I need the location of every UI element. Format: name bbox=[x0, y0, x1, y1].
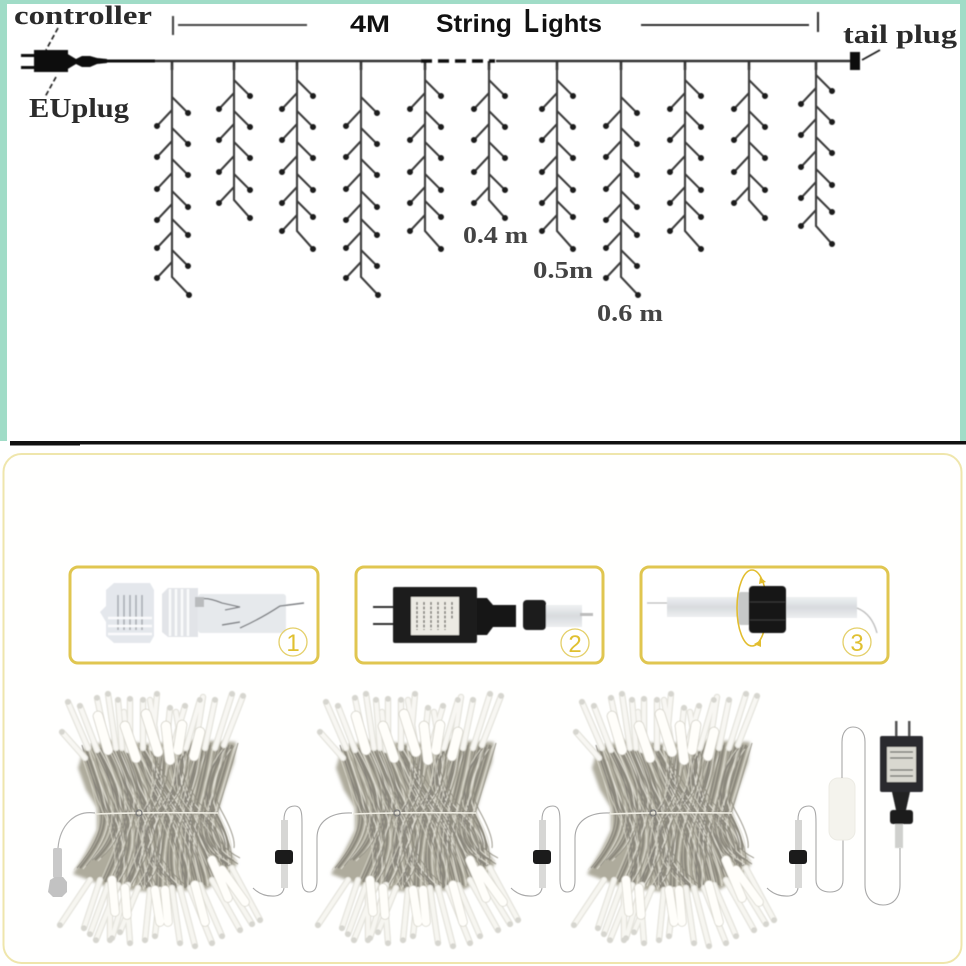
connector 1 and lead to bundle 2 bbox=[253, 806, 352, 896]
title: String Lights: String bbox=[436, 10, 512, 38]
dashed section of the cable bbox=[421, 59, 495, 63]
number 3: 3 bbox=[850, 630, 864, 657]
strand 0.6 m bbox=[606, 66, 638, 295]
number 3 bbox=[843, 628, 871, 657]
icon: black nut bbox=[749, 586, 786, 633]
icon: EU plug and controller bbox=[21, 50, 155, 72]
light bundle 1 bbox=[60, 694, 260, 946]
strand 0.5 m bbox=[801, 61, 832, 244]
icon: joined connector bbox=[647, 592, 877, 633]
title: String Lights: L bbox=[524, 2, 539, 39]
icon: end cap bbox=[100, 583, 154, 643]
string lights wiring diagram bbox=[21, 12, 880, 295]
icon: connector nut and lead bbox=[523, 600, 593, 630]
leader: EU plug bbox=[45, 77, 56, 97]
number 2 bbox=[561, 629, 589, 658]
leader: controller bbox=[46, 28, 58, 50]
number 2: 2 bbox=[568, 631, 582, 658]
light bundle 3 bbox=[574, 694, 774, 946]
lead from connector 3 to switch bbox=[816, 823, 843, 892]
strand 0.4 m bbox=[734, 66, 765, 218]
connected light strings assembly bbox=[48, 694, 923, 946]
strand 0.4 m bbox=[219, 66, 250, 218]
step 1 box: sealed tail connector bbox=[70, 567, 318, 663]
label: 0.4 m: 0.4 m bbox=[463, 223, 528, 249]
number 1: 1 bbox=[286, 630, 300, 657]
label: 0.6 m: 0.6 m bbox=[597, 301, 663, 327]
label: controller: controller bbox=[14, 1, 152, 30]
dimension line left bbox=[173, 16, 307, 35]
connector 3 bbox=[767, 806, 816, 896]
number 1 bbox=[279, 628, 307, 657]
strand 0.5 m bbox=[282, 66, 313, 249]
icicle strands bbox=[157, 61, 832, 295]
strand 0.6 m bbox=[346, 66, 378, 295]
strand 0.4 m bbox=[474, 66, 505, 218]
title: String Lights: ights bbox=[541, 10, 602, 38]
icon: threaded connector with wires bbox=[162, 588, 304, 637]
icon: tail plug bbox=[850, 50, 880, 70]
strand 0.6 m bbox=[157, 66, 189, 295]
main cable bbox=[150, 61, 850, 70]
icon: power adapter bbox=[373, 587, 516, 643]
inline switch bbox=[829, 778, 855, 840]
label: EU plug: EUplug bbox=[29, 93, 130, 123]
icon: rotation arrow ring bbox=[737, 570, 767, 647]
strand 0.5 m bbox=[410, 66, 441, 249]
dimension line right bbox=[641, 12, 818, 32]
power adapter with plug bbox=[880, 721, 923, 848]
panel: connection steps bbox=[4, 454, 962, 963]
strand 0.5 m bbox=[542, 66, 573, 249]
title: 4M: 4M bbox=[350, 11, 390, 38]
strand 0.5 m bbox=[670, 66, 701, 249]
end plug and lead of first bundle bbox=[48, 813, 95, 897]
step 3 box: connected and tightened bbox=[641, 567, 888, 663]
diagram background: mint frame bbox=[0, 0, 966, 441]
title: String Lights bbox=[436, 2, 602, 39]
light bundle 2 bbox=[318, 694, 518, 946]
label: 0.5 m: 0.5m bbox=[533, 258, 593, 284]
lead from switch to power adapter bbox=[842, 727, 900, 905]
connector 2 and lead to bundle 3 bbox=[511, 806, 610, 896]
step 2 box: power adapter and connector bbox=[356, 567, 603, 663]
label: tail plug: tail plug bbox=[843, 20, 957, 49]
